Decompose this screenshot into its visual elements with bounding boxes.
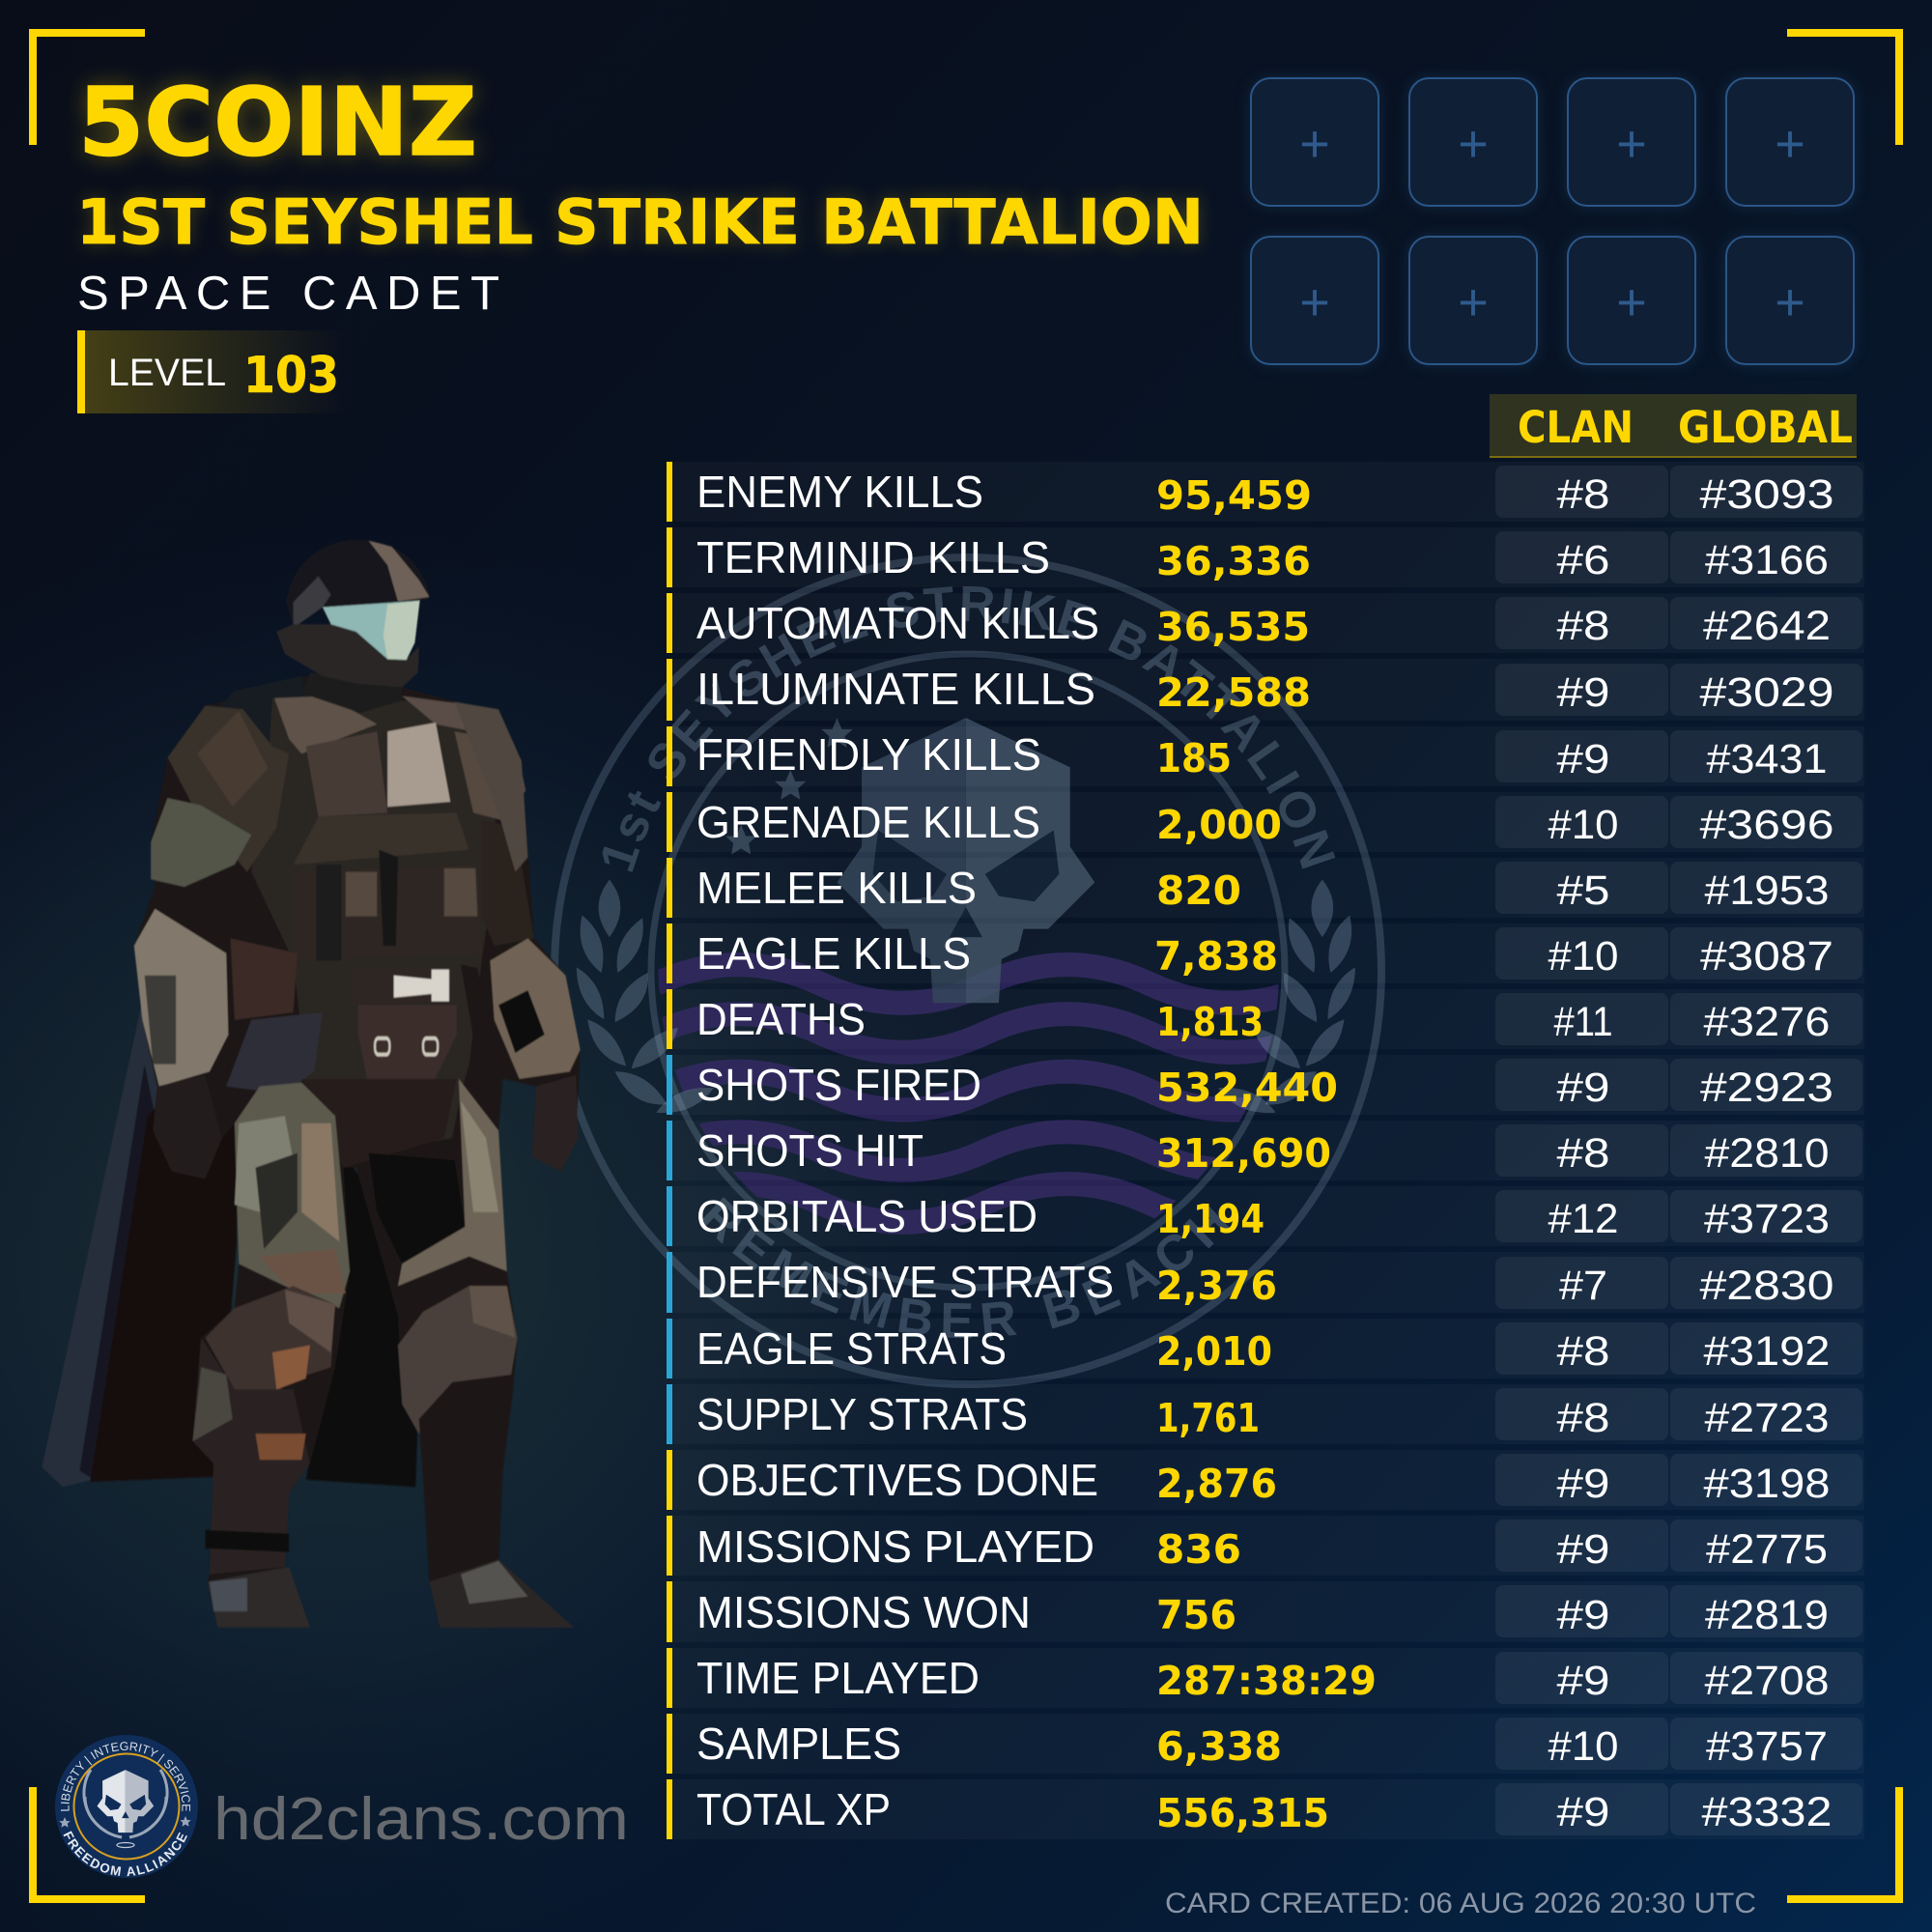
row: samples [667,1714,1864,1774]
row: automaton kills: #2642 [1703,603,1831,649]
row: samples: SAMPLES [696,1719,901,1769]
row: shots fired: SHOTS FIRED [696,1060,981,1110]
row: enemy kills [667,462,1864,522]
watermark emblem: 1st Seyshel Strike Battalion: REMEMBER BEACH [703,1197,1229,1339]
watermark emblem: 1st Seyshel Strike Battalion: 1st SEYSHEL STRIKE BATTALION [603,585,1335,872]
corner bracket bottom left [29,1787,145,1903]
row: illuminate kills [667,659,1864,721]
row: orbitals used: #3723 [1704,1196,1830,1242]
clan header: CLAN [1518,402,1634,453]
row: illuminate kills: #3029 [1700,669,1833,716]
corner bracket bottom right [1787,1787,1903,1903]
row: orbitals used: ORBITALS USED [696,1191,1037,1241]
row: eagle kills: EAGLE KILLS [696,928,971,979]
corner bracket top left [29,29,145,145]
row: objectives done: 2,876 [1156,1461,1277,1507]
row: supply strats: 1,761 [1156,1395,1260,1441]
freedom alliance logo: LIBERTY | INTEGRITY | SERVICE [60,1742,191,1811]
row: deaths [667,989,1864,1049]
player name: 5COINZ [78,68,477,177]
row: orbitals used: 1,194 [1156,1196,1264,1242]
row: objectives done [667,1450,1864,1510]
row: supply strats: #8 [1557,1395,1609,1441]
row: eagle strats: #8 [1557,1328,1609,1375]
row: automaton kills: 36,535 [1156,604,1310,650]
row: melee kills: MELEE KILLS [696,863,977,913]
row: grenade kills: #3696 [1700,802,1833,848]
row: terminid kills: TERMINID KILLS [696,532,1050,582]
row: missions played: 836 [1156,1526,1241,1573]
row: terminid kills: #3166 [1705,537,1829,583]
row: defensive strats [667,1252,1864,1313]
row: samples: 6,338 [1156,1723,1282,1770]
row: friendly kills: FRIENDLY KILLS [696,729,1041,780]
row: friendly kills: #9 [1557,736,1609,782]
rank column headers [1490,394,1857,458]
row: enemy kills: ENEMY KILLS [696,467,983,517]
row: supply strats: #2723 [1704,1395,1830,1441]
empty medal slots grid: + [1775,273,1805,331]
row: deaths: DEATHS [696,994,866,1044]
row: missions played: #2775 [1706,1526,1828,1573]
row: eagle kills [667,923,1864,983]
row: missions won: #2819 [1705,1592,1829,1638]
row: missions played: #9 [1557,1526,1609,1573]
row: melee kills: #5 [1557,867,1609,914]
row: melee kills: 820 [1156,867,1241,914]
row: time played: TIME PLAYED [696,1653,980,1703]
level badge [77,330,348,413]
row: orbitals used: #12 [1548,1196,1619,1242]
row: supply strats [667,1384,1864,1444]
row: terminid kills [667,527,1864,587]
row: total xp: 556,315 [1156,1790,1329,1836]
global header: GLOBAL [1678,402,1853,453]
row: terminid kills: #6 [1557,537,1609,583]
row: melee kills [667,858,1864,918]
row: shots hit: 312,690 [1156,1130,1331,1177]
row: shots hit: SHOTS HIT [696,1125,923,1176]
row: shots hit: #2810 [1704,1130,1830,1177]
row: total xp: #9 [1557,1789,1609,1835]
row: missions won: MISSIONS WON [696,1587,1031,1637]
row: eagle kills: #3087 [1700,933,1833,980]
row: defensive strats: #2830 [1700,1263,1833,1309]
card creation timestamp: CARD CREATED: 06 AUG 2026 20:30 UTC [1165,1888,1756,1919]
row: shots hit: #8 [1557,1130,1609,1177]
row: shots fired: 532,440 [1156,1065,1338,1111]
freedom alliance logo: FREEDOM ALLIANCE [64,1831,187,1876]
freedom alliance logo [55,1735,198,1878]
row: grenade kills: GRENADE KILLS [696,797,1040,847]
row: enemy kills: #8 [1557,471,1609,518]
row: terminid kills: 36,336 [1156,538,1311,584]
row: shots fired: #9 [1557,1065,1609,1111]
row: supply strats: SUPPLY STRATS [696,1389,1028,1439]
row: eagle kills: 7,838 [1154,933,1278,980]
row: eagle strats: EAGLE STRATS [696,1323,1007,1374]
row: total xp: #3332 [1702,1789,1832,1835]
row: grenade kills [667,792,1864,852]
row: time played: #9 [1557,1658,1609,1704]
row: objectives done: OBJECTIVES DONE [696,1455,1098,1505]
row: shots fired: #2923 [1700,1065,1833,1111]
row: illuminate kills: #9 [1557,669,1609,716]
row: melee kills: #1953 [1704,867,1830,914]
row: automaton kills [667,593,1864,653]
row: missions won: #9 [1557,1592,1609,1638]
soldier in armor with cape [42,540,581,1628]
row: eagle strats: 2,010 [1156,1328,1272,1375]
player title: SPACE CADET [77,268,499,320]
row: defensive strats: #7 [1559,1263,1607,1309]
row: enemy kills: #3093 [1700,471,1833,518]
row: objectives done: #3198 [1704,1461,1830,1507]
row: orbitals used [667,1186,1864,1246]
corner bracket top right [1787,29,1903,145]
row: total xp [667,1779,1864,1839]
empty medal slots grid: + [1775,115,1805,173]
stats table [667,462,1864,1839]
row: automaton kills: AUTOMATON KILLS [696,598,1099,648]
level number: 103 [243,347,339,405]
row: missions played: MISSIONS PLAYED [696,1521,1094,1572]
row: defensive strats: DEFENSIVE STRATS [696,1257,1114,1307]
row: total xp: TOTAL XP [696,1784,891,1834]
row: grenade kills: 2,000 [1156,802,1282,848]
empty medal slots grid: + [1299,273,1330,331]
level label: LEVEL [108,352,226,394]
row: time played: #2708 [1704,1658,1830,1704]
row: time played: 287:38:29 [1156,1658,1377,1704]
site name: hd2clans.com [213,1786,629,1853]
watermark emblem: 1st Seyshel Strike Battalion [551,554,1385,1388]
row: samples: #3757 [1706,1723,1828,1770]
row: deaths: #11 [1553,999,1613,1045]
row: eagle strats [667,1319,1864,1378]
row: time played [667,1648,1864,1708]
row: friendly kills [667,726,1864,786]
row: friendly kills: 185 [1156,735,1232,781]
row: objectives done: #9 [1557,1461,1609,1507]
row: shots fired [667,1055,1864,1115]
row: samples: #10 [1548,1723,1619,1770]
row: eagle kills: #10 [1548,933,1619,980]
row: grenade kills: #10 [1548,802,1619,848]
row: shots hit [667,1121,1864,1180]
row: automaton kills: #8 [1557,603,1609,649]
empty medal slots grid: + [1616,273,1647,331]
row: friendly kills: #3431 [1706,736,1828,782]
row: deaths: 1,813 [1156,999,1264,1045]
row: missions won: 756 [1156,1592,1236,1638]
row: illuminate kills: ILLUMINATE KILLS [696,664,1095,714]
row: missions played [667,1516,1864,1576]
clan name: 1ST SEYSHEL STRIKE BATTALION [76,187,1204,259]
row: deaths: #3276 [1704,999,1830,1045]
row: defensive strats: 2,376 [1156,1263,1277,1309]
row: missions won [667,1581,1864,1642]
empty medal slots grid: + [1458,273,1489,331]
empty medal slots grid [1251,78,1854,364]
empty medal slots grid: + [1616,115,1647,173]
row: illuminate kills: 22,588 [1156,669,1311,716]
empty medal slots grid: + [1458,115,1489,173]
empty medal slots grid: + [1299,115,1330,173]
row: enemy kills: 95,459 [1156,472,1312,519]
row: eagle strats: #3192 [1704,1328,1830,1375]
